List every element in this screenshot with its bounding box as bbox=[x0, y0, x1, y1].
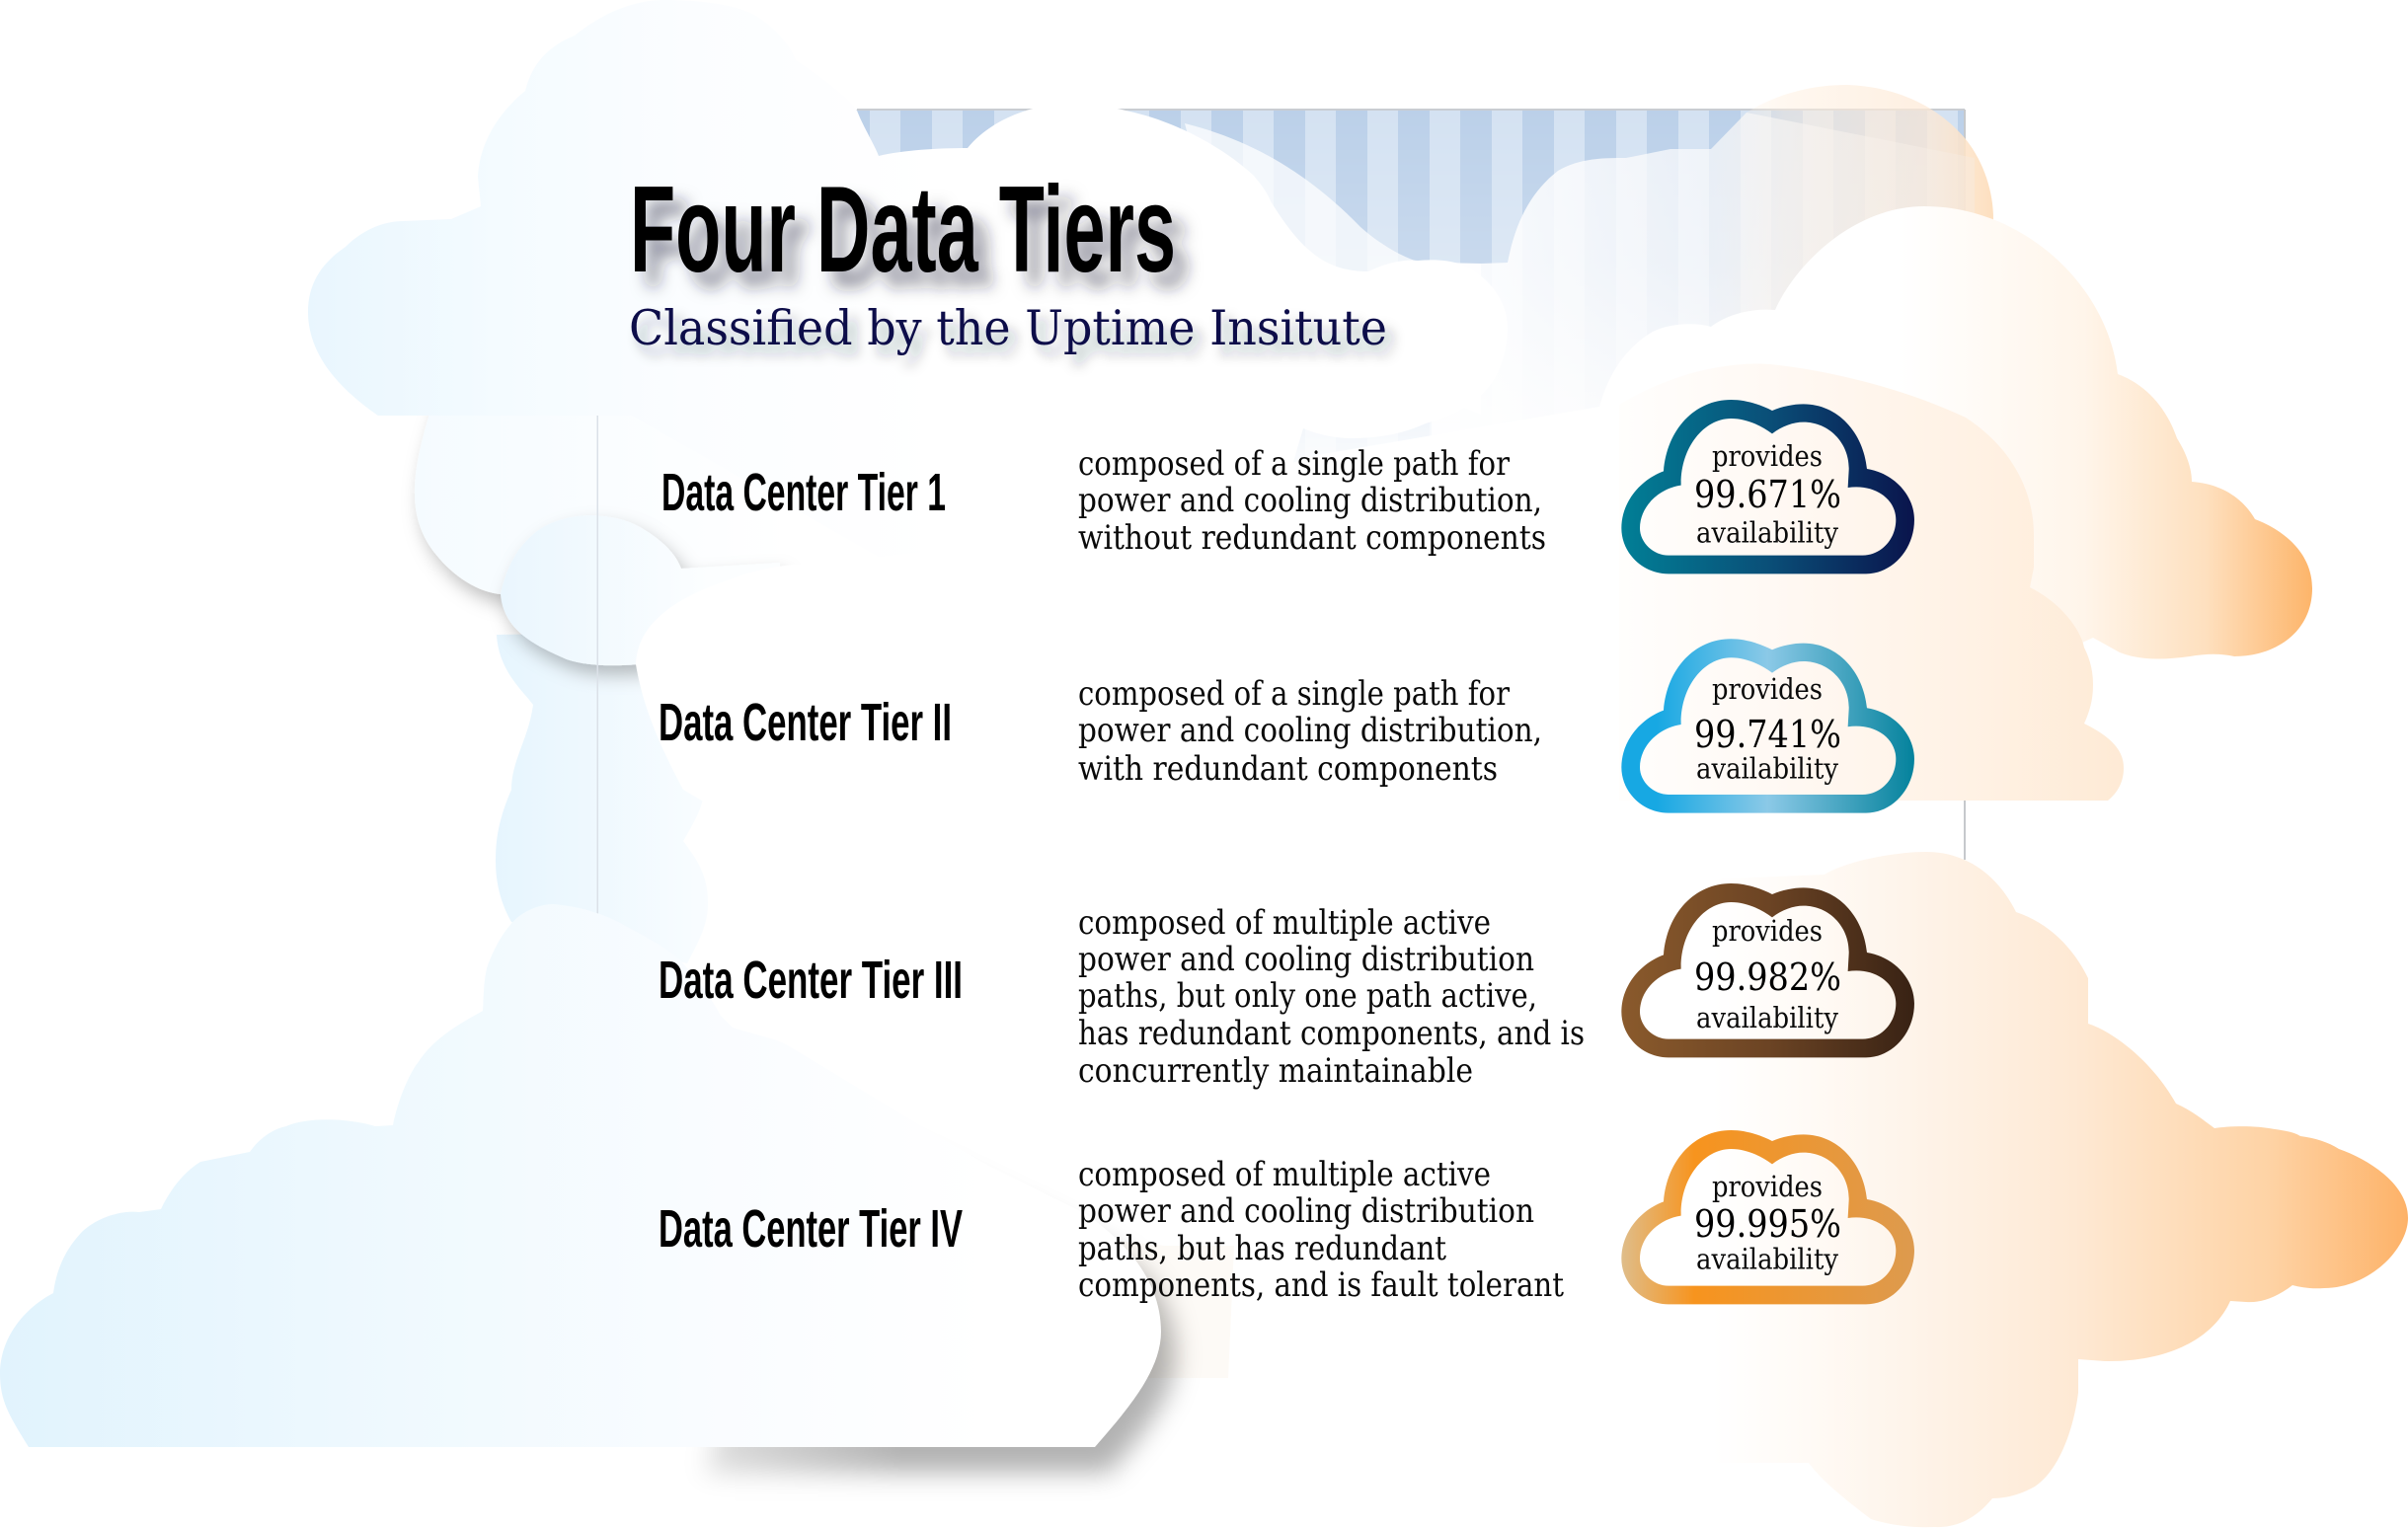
tier 2 description bbox=[1078, 674, 1542, 789]
tier 1 description bbox=[1078, 444, 1546, 558]
tier 1 description: power and cooling distribution, bbox=[1078, 481, 1542, 520]
row: tier 2 bbox=[659, 639, 1914, 813]
tier 1 description: without redundant components bbox=[1078, 518, 1546, 558]
icon: cloud tier 1 availability bbox=[1621, 400, 1914, 573]
tier 3 description: composed of multiple active bbox=[1078, 903, 1491, 943]
cloud: cream middle bbox=[1619, 363, 2124, 801]
icon: cloud tier 2 availability bbox=[1621, 639, 1914, 813]
cloud: peach back top bbox=[1711, 85, 1993, 395]
row: tier 1 bbox=[661, 400, 1914, 573]
cloud: blue lobe upper bbox=[415, 395, 1086, 594]
subtitle: Classified by the Uptime Insitute bbox=[629, 300, 1387, 356]
row: tier 3 bbox=[659, 883, 1914, 1091]
tier 2 description: with redundant components bbox=[1078, 749, 1498, 789]
tier 1 heading: Data Center Tier 1 bbox=[661, 463, 946, 522]
icon: cloud tier 3 availability: 99.982% bbox=[1694, 955, 1841, 999]
tier 3 description: has redundant components, and is bbox=[1078, 1014, 1585, 1053]
tier 4 description bbox=[1078, 1155, 1564, 1305]
icon: cloud tier 2 availability: provides bbox=[1712, 672, 1823, 706]
cloud: translucent veil left lobe bbox=[1185, 123, 1481, 415]
icon: cloud tier 3 availability: provides bbox=[1712, 914, 1823, 948]
tier 3 description: power and cooling distribution bbox=[1078, 940, 1534, 979]
icon: cloud tier 4 availability: availability bbox=[1696, 1242, 1839, 1275]
tier 4 heading: Data Center Tier IV bbox=[659, 1199, 963, 1259]
icon: cloud tier 2 availability: 99.741% bbox=[1694, 713, 1841, 756]
cloud: translucent veil right bbox=[1432, 113, 1975, 553]
tier 4 description: paths, but has redundant bbox=[1078, 1229, 1446, 1268]
cloud shadow: bottom front bbox=[703, 1232, 1189, 1489]
tier 3 heading: Data Center Tier III bbox=[659, 951, 963, 1010]
icon: cloud tier 3 availability: availability bbox=[1696, 1001, 1839, 1034]
cloud: blue bottom front bbox=[0, 904, 1161, 1447]
tier 3 description: paths, but only one path active, bbox=[1078, 976, 1537, 1016]
tier 2 description: power and cooling distribution, bbox=[1078, 711, 1542, 750]
striped background panel bbox=[856, 109, 1966, 860]
tier 3 description bbox=[1078, 903, 1585, 1091]
title: Four Data Tiers bbox=[630, 162, 1176, 298]
tier 1 description: composed of a single path for bbox=[1078, 444, 1511, 484]
cloud: pale blue column bbox=[496, 632, 711, 963]
cloud: blue top bbox=[308, 0, 1508, 563]
icon: cloud tier 2 availability: availability bbox=[1696, 752, 1839, 786]
icon: cloud tier 1 availability: availability bbox=[1696, 515, 1839, 549]
tier 2 heading: Data Center Tier II bbox=[659, 693, 952, 752]
cloud: main right bbox=[1599, 206, 2312, 691]
icon: cloud tier 3 availability bbox=[1621, 883, 1914, 1057]
tier 3 description: concurrently maintainable bbox=[1078, 1051, 1473, 1091]
tier 2 description: composed of a single path for bbox=[1078, 674, 1511, 714]
cloud: blue lobe lower bbox=[501, 515, 780, 665]
cloud: white centre bbox=[636, 407, 1659, 829]
icon: cloud tier 4 availability: provides bbox=[1712, 1170, 1823, 1203]
faint panel remnant behind lower cloud bbox=[1064, 1239, 1234, 1378]
icon: cloud tier 1 availability: provides bbox=[1712, 439, 1823, 473]
panel left edge line bbox=[596, 416, 598, 915]
tier 4 description: components, and is fault tolerant bbox=[1078, 1265, 1564, 1305]
tier 4 description: composed of multiple active bbox=[1078, 1155, 1491, 1194]
cloud: peach bottom right bbox=[1481, 852, 2408, 1527]
icon: cloud tier 4 availability: 99.995% bbox=[1694, 1202, 1841, 1246]
tier 4 description: power and cooling distribution bbox=[1078, 1191, 1534, 1231]
row: tier 4 bbox=[659, 1130, 1914, 1305]
icon: cloud tier 4 availability bbox=[1621, 1130, 1914, 1304]
icon: cloud tier 1 availability: 99.671% bbox=[1694, 473, 1841, 516]
